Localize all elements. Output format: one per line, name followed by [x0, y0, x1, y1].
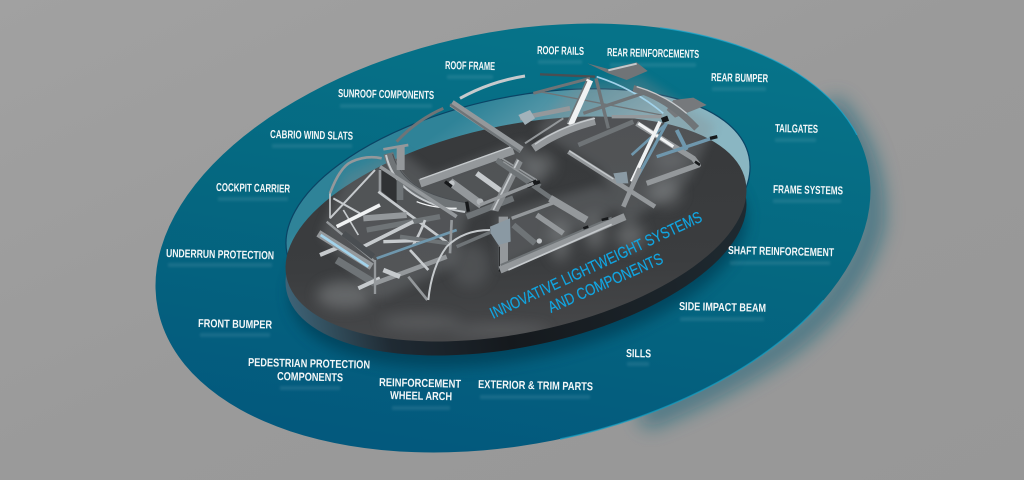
label: reinforcement wheel arch	[379, 377, 461, 403]
label: sunroof components: SUNROOF COMPONENTS	[338, 88, 434, 102]
centre title: INNOVATIVE LIGHTWEIGHT SYSTEMS	[488, 209, 705, 323]
dark disc edge	[265, 93, 767, 393]
ground shadow	[650, 110, 872, 416]
label: pedestrian protection components: PEDESTRIAN PROTECTION	[248, 357, 370, 372]
label: shaft reinforcement: SHAFT REINFORCEMENT	[728, 245, 834, 259]
label: cockpit carrier: COCKPIT CARRIER	[216, 182, 291, 196]
label: tailgates: TAILGATES	[775, 123, 818, 136]
label: roof frame: ROOF FRAME	[445, 60, 495, 73]
label: front bumper: FRONT BUMPER	[198, 318, 273, 332]
label: roof rails: ROOF RAILS	[537, 45, 584, 58]
label: side impact beam: SIDE IMPACT BEAM	[679, 301, 766, 315]
label: underrun protection: UNDERRUN PROTECTION	[166, 248, 274, 262]
label: rear bumper: REAR BUMPER	[711, 72, 769, 85]
label: exterior and trim parts: EXTERIOR & TRIM PARTS	[478, 379, 593, 393]
dark disc top	[286, 116, 746, 342]
frame: rear section	[480, 62, 717, 270]
label: frame systems: FRAME SYSTEMS	[773, 184, 843, 197]
label: cabrio wind slats: CABRIO WIND SLATS	[270, 129, 353, 143]
outer teal platter	[156, 24, 870, 452]
label: reinforcement wheel arch: WHEEL ARCH	[390, 390, 452, 403]
label: pedestrian protection components: COMPONENTS	[277, 371, 343, 384]
frame: front and cabin section	[318, 76, 540, 300]
label: sills: SILLS	[626, 348, 651, 361]
reflections of the labels	[168, 60, 841, 410]
centre title: AND COMPONENTS	[546, 251, 666, 317]
centre title	[488, 209, 705, 323]
glass disc	[265, 51, 771, 359]
car body frame	[318, 62, 717, 300]
label: reinforcement wheel arch: REINFORCEMENT	[379, 377, 461, 391]
label: rear reinforcements: REAR REINFORCEMENTS	[607, 47, 699, 61]
inner disc shadow on platter	[270, 108, 766, 404]
frame: soft tonal underlay	[320, 75, 715, 300]
label: pedestrian protection components	[248, 357, 370, 384]
